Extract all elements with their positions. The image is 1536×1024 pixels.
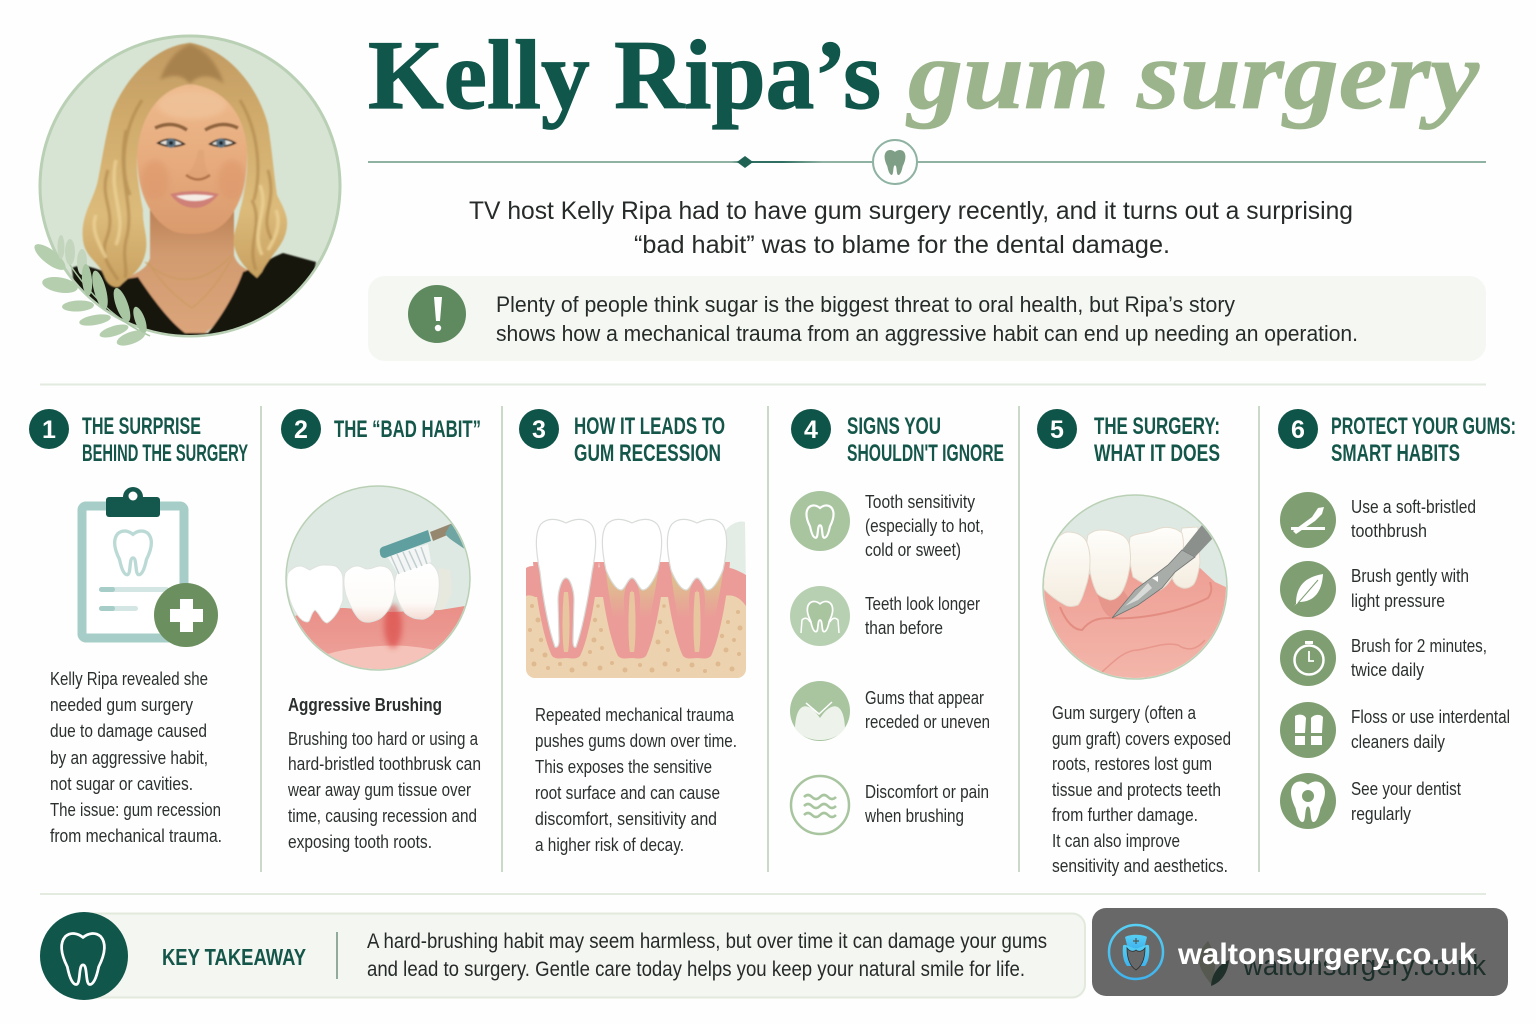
body text 5: tissue and protects teeth [1052, 780, 1221, 800]
heading 6 [1331, 413, 1516, 467]
heading 3: HOW IT LEADS TO [574, 413, 725, 440]
icon: clipboard with tooth and medical plus [82, 487, 218, 647]
sign: discomfort when brushing: Discomfort or pain [865, 782, 989, 802]
heading 5: THE SURGERY: [1094, 413, 1220, 440]
heading 1 [82, 413, 248, 467]
title divider with tooth badge [368, 140, 1486, 184]
sign: discomfort when brushing: when brushing [864, 806, 964, 826]
subheading: aggressive brushing: Aggressive Brushing [288, 694, 442, 715]
body text 1: not sugar or cavities. [50, 774, 193, 794]
body text 5 [1052, 703, 1231, 876]
number badge 4: 4 [804, 416, 818, 444]
habit: brush gently: Brush gently with [1351, 566, 1469, 586]
illustration: surgical instrument at the gum line [1040, 495, 1232, 690]
sign: tooth sensitivity [790, 491, 984, 560]
body text 1: Kelly Ripa revealed she [50, 669, 208, 689]
body text 1: needed gum surgery [50, 695, 193, 715]
title [368, 21, 1480, 130]
heading 1: THE SURPRISE [82, 413, 201, 440]
habit: floss: Floss or use interdental [1351, 707, 1510, 727]
website badge: waltonsurgery.co.uk [1177, 938, 1476, 971]
number badge 1: 1 [42, 416, 56, 444]
website badge [1092, 908, 1508, 996]
body text 3: root surface and can cause [535, 783, 720, 803]
habit: brush gently [1280, 561, 1469, 617]
panel 5: the surgery [1037, 409, 1232, 876]
habit: stopwatch, two minutes [1280, 630, 1487, 686]
body text 3: discomfort, sensitivity and [535, 809, 717, 829]
body text 5: gum graft) covers exposed [1052, 729, 1231, 749]
portrait of Kelly Ripa [31, 36, 340, 349]
number badge 6: 6 [1291, 416, 1305, 444]
heading 3 [574, 413, 725, 467]
sign: discomfort when brushing [791, 776, 989, 834]
sign: receded gums: Gums that appear [865, 688, 984, 708]
illustration: toothbrush scrubbing teeth and red gums [285, 485, 471, 671]
number badge 5: 5 [1050, 416, 1064, 444]
habit: stopwatch, two minutes: Brush for 2 minutes, [1351, 636, 1487, 656]
key takeaway bar: A hard-brushing habit may seem harmless, but over time it can damage your gums [367, 930, 1047, 953]
body text 1: from mechanical trauma. [50, 826, 222, 846]
number badge 2 [281, 409, 321, 449]
body text 5: roots, restores lost gum [1052, 754, 1212, 774]
heading 5 [1094, 413, 1220, 467]
panel 6: protect your gums [1278, 409, 1516, 829]
heading 6: SMART HABITS [1331, 440, 1460, 467]
panel 2: the bad habit [280, 409, 481, 852]
icon: exclamation mark [408, 285, 466, 343]
heading 4: SIGNS YOU [847, 413, 941, 440]
underlying leaf logo and dark site name [1199, 941, 1486, 986]
body text 2: hard-bristled toothbrusk can [288, 754, 481, 774]
sign: teeth look longer: than before [865, 618, 943, 638]
icon: nurse in blue ring [1109, 925, 1163, 979]
key takeaway bar: KEY TAKEAWAY [162, 944, 306, 970]
icon: tooth badge [40, 912, 128, 1000]
heading 2: THE “BAD HABIT” [334, 416, 481, 443]
underlying leaf logo and dark site name: waltonsurgery.co.uk [1242, 950, 1486, 982]
body text 1 [50, 669, 222, 846]
body text 5: sensitivity and aesthetics. [1052, 856, 1228, 876]
body text 1: The issue: gum recession [50, 800, 221, 820]
body text 5: from further damage. [1052, 805, 1198, 825]
number badge 5 [1037, 409, 1077, 449]
title: Kelly Ripa’s [368, 21, 881, 130]
habit: floss [1280, 702, 1510, 758]
heading 4 [847, 413, 1004, 467]
illustration: cross-section of receding gums and exposed roots [526, 519, 746, 680]
habit: see your dentist: regularly [1351, 804, 1411, 824]
body text 3: pushes gums down over time. [535, 731, 737, 751]
number badge 4 [791, 409, 831, 449]
habit: brush gently: light pressure [1351, 591, 1445, 611]
body text 3: This exposes the sensitive [535, 757, 712, 777]
number badge 2: 2 [294, 416, 308, 444]
callout: sugar vs mechanical trauma: Plenty of people think sugar is the biggest threat to oral health, but Ripa’s story [496, 292, 1236, 317]
sign: receded gums [790, 681, 990, 741]
intro text: TV host Kelly Ripa had to have gum surgery recently, and it turns out a surprising [469, 197, 1353, 225]
sign: tooth sensitivity: cold or sweet) [865, 540, 961, 560]
body text 2: wear away gum tissue over [287, 780, 471, 800]
habit: stopwatch, two minutes: twice daily [1351, 660, 1424, 680]
heading 5: WHAT IT DOES [1094, 440, 1220, 467]
key takeaway bar: and lead to surgery. Gentle care today helps you keep your natural smile for life. [367, 958, 1025, 981]
callout: sugar vs mechanical trauma: shows how a mechanical trauma from an aggressive habit can end up needing an operation. [496, 321, 1358, 346]
habit: soft-bristled toothbrush [1280, 492, 1476, 548]
sign: tooth sensitivity: Tooth sensitivity [865, 492, 975, 512]
intro text [469, 197, 1353, 259]
body text 2: Brushing too hard or using a [288, 729, 479, 749]
body text 1: due to damage caused [50, 721, 207, 741]
body text 5: Gum surgery (often a [1052, 703, 1197, 723]
number badge 3 [519, 409, 559, 449]
body text 3: Repeated mechanical trauma [535, 705, 735, 725]
leaf sprig [31, 235, 150, 349]
habit: floss: cleaners daily [1351, 732, 1445, 752]
sign: tooth sensitivity: (especially to hot, [865, 516, 984, 536]
panel 3: how it leads to gum recession [519, 409, 746, 855]
heading 4: SHOULDN'T IGNORE [847, 440, 1004, 467]
body text 2: exposing tooth roots. [288, 832, 432, 852]
habit: see your dentist [1280, 773, 1461, 829]
body text 2 [287, 729, 481, 852]
habit: soft-bristled toothbrush: toothbrush [1351, 521, 1427, 541]
number badge 3: 3 [532, 416, 546, 444]
title: gum surgery [906, 21, 1480, 130]
body text 5: It can also improve [1052, 831, 1180, 851]
sign: teeth look longer [790, 586, 980, 646]
sign: receded gums: receded or uneven [865, 712, 990, 732]
heading 3: GUM RECESSION [574, 440, 721, 467]
number badge 6 [1278, 409, 1318, 449]
body text 2: time, causing recession and [288, 806, 477, 826]
callout: sugar vs mechanical trauma [368, 276, 1486, 361]
body text 1: by an aggressive habit, [50, 748, 208, 768]
panel 4: signs you shouldn't ignore [790, 409, 1004, 834]
panel 1: the surprise behind the surgery [29, 409, 248, 846]
body text 3: a higher risk of decay. [535, 835, 684, 855]
sign: teeth look longer: Teeth look longer [865, 594, 980, 614]
heading 1: BEHIND THE SURGERY [82, 440, 248, 467]
key takeaway bar [40, 912, 1085, 1000]
habit: soft-bristled toothbrush: Use a soft-bristled [1351, 497, 1476, 517]
habit: see your dentist: See your dentist [1351, 779, 1461, 799]
number badge 1 [29, 409, 69, 449]
body text 3 [535, 705, 737, 855]
intro text: “bad habit” was to blame for the dental damage. [634, 231, 1170, 259]
